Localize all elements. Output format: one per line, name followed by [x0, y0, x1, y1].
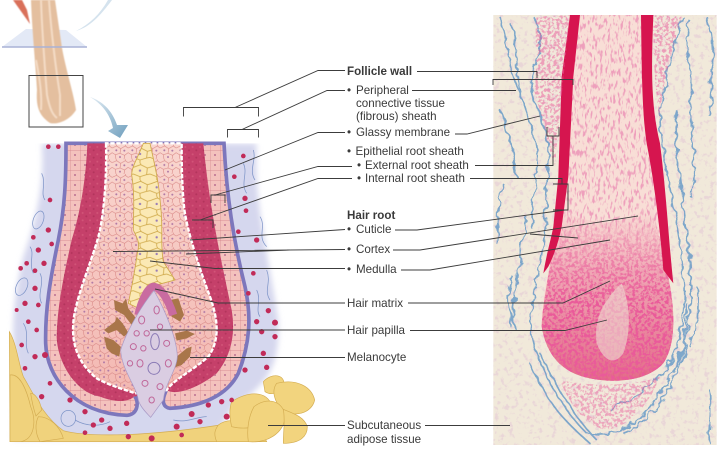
arrow: zoom arrow to follicle detail [90, 97, 128, 138]
label: Hair matrix: Hair matrix [347, 297, 403, 310]
arrow: top curved arrow [76, 0, 112, 31]
connective tissue fibers and cells [13, 150, 270, 426]
papilla cells [127, 306, 171, 403]
label: Peripheral connective tissue (fibrous) sheath: Peripheral [356, 84, 409, 97]
hair cells speckle [542, 15, 673, 381]
label: Melanocyte: Melanocyte [347, 351, 406, 364]
label: Glassy membrane: • [347, 126, 351, 139]
outer sheath texture right [653, 15, 682, 123]
panel: follicle illustration [0, 127, 333, 443]
label: Cortex: • [347, 243, 351, 256]
hair shaft and follicle [31, 0, 76, 123]
overview illustration: hair follicle in skin [2, 0, 128, 138]
hair shaft inner strands [36, 0, 60, 118]
follicle wall [46, 143, 249, 415]
zoom box [29, 76, 83, 127]
medulla cells [128, 143, 175, 307]
hair cells [73, 143, 217, 393]
adipose tissue left [9, 332, 220, 442]
label: Epithelial root sheath: • [347, 145, 351, 158]
label: Subcutaneous adipose tissue: Subcutaneous [347, 419, 421, 432]
label: Subcutaneous adipose tissue: adipose tissue [347, 433, 421, 446]
hair papilla region [596, 283, 629, 360]
adipose tissue right [215, 376, 315, 443]
hair bulb speckle [542, 222, 674, 381]
label: Peripheral connective tissue (fibrous) sheath: (fibrous) sheath [356, 110, 437, 123]
skin plane edge [2, 46, 87, 48]
label: Medulla: Medulla [356, 263, 397, 276]
panel: histology micrograph [493, 15, 717, 445]
label: Follicle wall: Follicle wall [347, 65, 412, 78]
leader lines [113, 70, 638, 426]
label: Internal root sheath: Internal root sheath [365, 172, 465, 185]
label: Medulla: • [347, 263, 351, 276]
blood vessel [13, 0, 30, 24]
capsule below bulb [560, 377, 660, 430]
outer sheath texture left [533, 15, 570, 167]
connective tissue background [13, 143, 279, 440]
label: Cuticle: Cuticle [356, 223, 391, 236]
tissue background [493, 15, 717, 445]
label: External root sheath: External root sheath [365, 159, 469, 172]
follicle shaft pale [541, 15, 673, 381]
left red internal sheath [543, 15, 580, 273]
label: External root sheath: • [357, 159, 361, 172]
label: Internal root sheath: • [357, 172, 361, 185]
label: Peripheral connective tissue (fibrous) sheath: • [347, 84, 351, 97]
connective tissue red nuclei [15, 144, 278, 441]
label: Cortex: Cortex [356, 243, 390, 256]
label: Glassy membrane: Glassy membrane [356, 126, 450, 139]
hair root fill [73, 143, 217, 393]
internal root sheath red band [57, 143, 233, 401]
icon: blue skin plane [2, 29, 87, 47]
label: Hair papilla: Hair papilla [347, 324, 406, 337]
right red internal sheath [641, 15, 673, 283]
label: Epithelial root sheath: Epithelial root sheath [356, 145, 464, 158]
label: Hair root: Hair root [347, 209, 395, 222]
tissue pink speckle [493, 15, 717, 445]
medulla fill [128, 143, 175, 307]
blue connective fibers [497, 17, 712, 443]
hair bulb red [542, 203, 673, 381]
melanocytes [104, 298, 195, 367]
connective tissue top mask [0, 127, 333, 143]
label: Cuticle: • [347, 223, 351, 236]
hair matrix [138, 287, 173, 315]
label: Peripheral connective tissue (fibrous) sheath: connective tissue [356, 97, 445, 110]
hair papilla [121, 291, 177, 417]
